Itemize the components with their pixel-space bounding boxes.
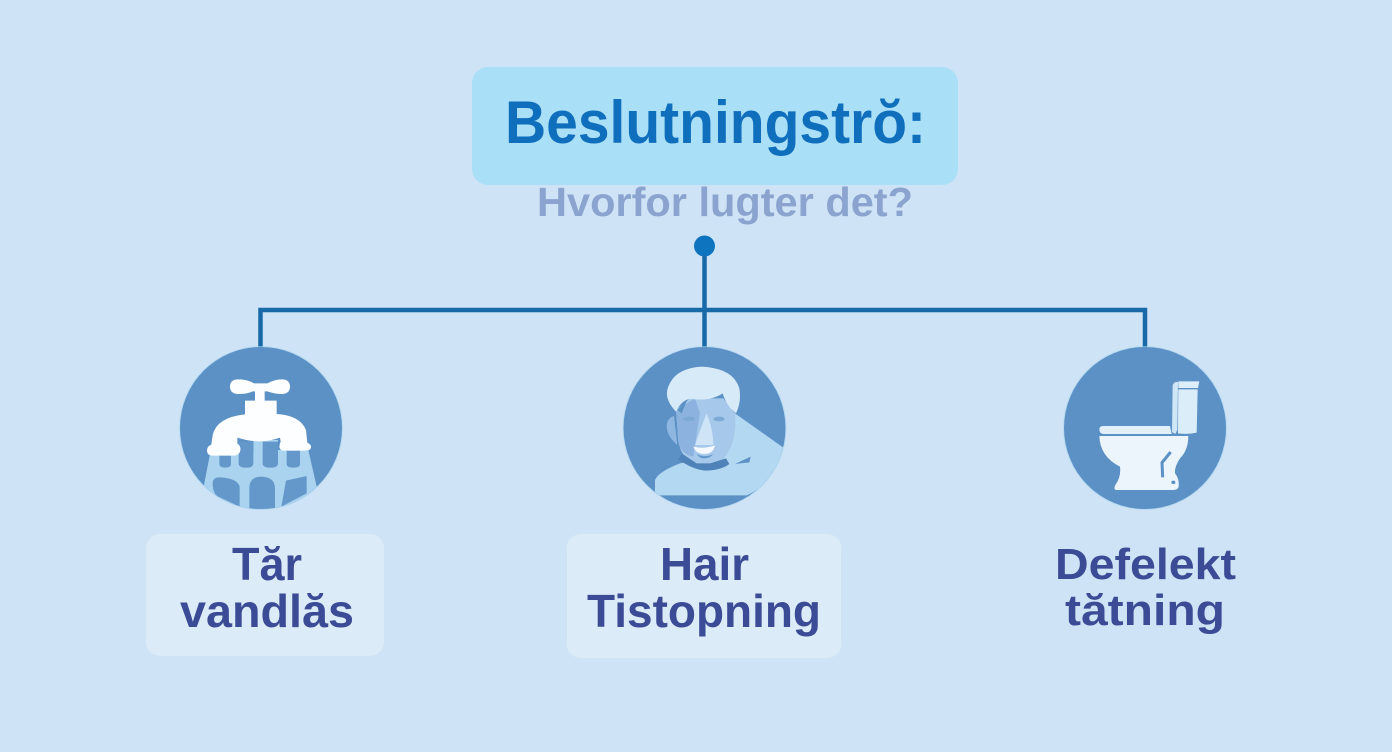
label line 2: Tistopning (587, 585, 821, 637)
label line 1: Hair (660, 538, 749, 590)
icon: toilet (1063, 346, 1227, 510)
icon: faucet with water (179, 346, 343, 510)
label card: Hair Tistopning (567, 534, 841, 658)
subtitle: Hvorfor lugter det? (537, 179, 913, 225)
root node dot (694, 236, 715, 256)
label card: Tăr vandlăs (146, 534, 384, 656)
title box (472, 67, 958, 185)
label line 1: Tăr (232, 538, 302, 590)
label line 1: Defelekt (1055, 540, 1236, 589)
label line 2: vandlăs (180, 585, 354, 637)
title: Beslutningstrŏ: (505, 89, 926, 156)
decision tree connectors (260, 236, 1145, 348)
title panel (472, 67, 958, 185)
icon: person's head (622, 346, 787, 510)
label: Defelekt tătning (1055, 540, 1236, 635)
label line 2: tătning (1065, 586, 1225, 635)
